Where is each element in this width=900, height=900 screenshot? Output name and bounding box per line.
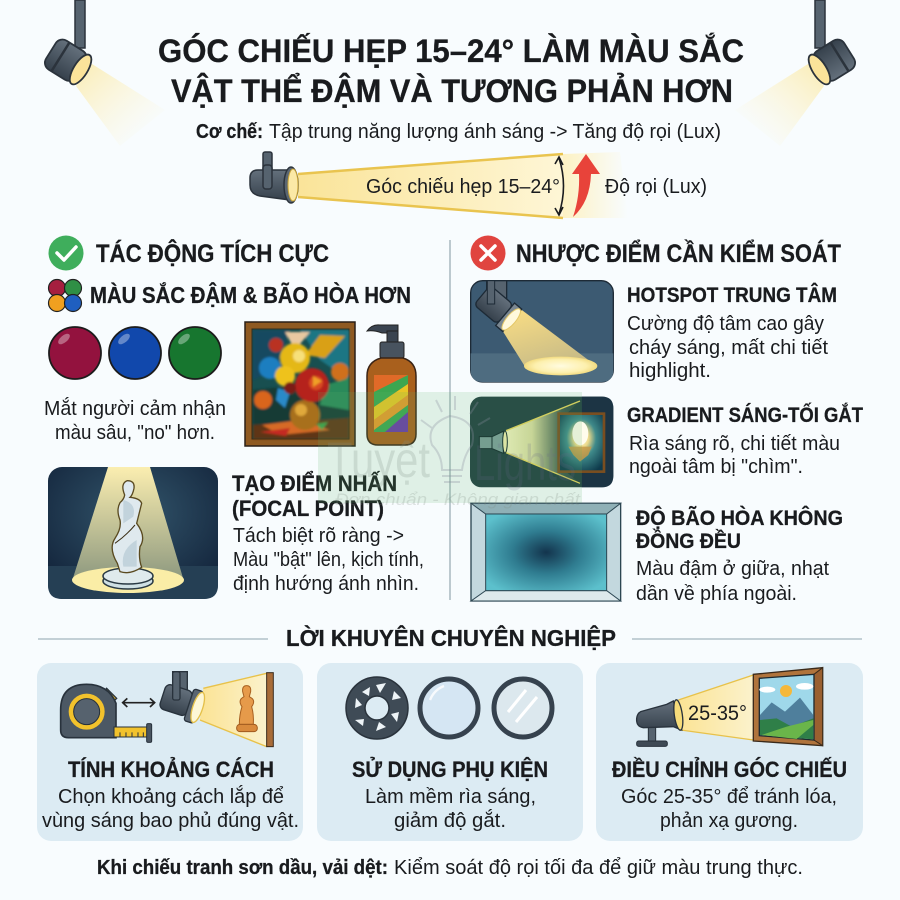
icon: honeycomb disc [346,677,408,739]
icon: filter [494,679,552,737]
panel: harsh gradient [470,397,863,487]
text: harsh gradient [627,403,863,478]
text: hotspot: HOTSPOT TRUNG TÂM [627,283,837,307]
text: hotspot [627,283,837,382]
angle value: 25-35° [688,702,747,725]
heading: positive effects: TÁC ĐỘNG TÍCH CỰC [96,238,329,268]
footer note [97,857,803,879]
text: perception: màu sâu, "no" hơn. [55,422,215,444]
text: angle: Góc 25-35° để tránh lóa, [621,786,837,808]
image: harsh gradient lamp [470,397,613,487]
watermark: Lights [474,435,576,491]
icon: angled lamp and picture [637,668,823,746]
text: focal point: TẠO ĐIỂM NHẤN [232,471,397,496]
text: focal point [232,471,424,595]
text: uneven saturation: ĐỒNG ĐỀU [636,529,741,553]
text: angle: ĐIỀU CHỈNH GÓC CHIẾU [612,757,847,782]
image: statue spotlight [48,467,218,599]
text: focal point: định hướng ánh nhìn. [233,573,419,595]
icon: tape measure and lamp [61,672,273,747]
text: focal point: (FOCAL POINT) [232,496,384,521]
text: uneven saturation: ĐỘ BÃO HÒA KHÔNG [636,506,843,530]
text: accessories: SỬ DỤNG PHỤ KIỆN [352,757,548,782]
text: uneven saturation: dần về phía ngoài. [636,583,797,605]
text: angle [612,757,847,832]
text: perception: Mắt người cảm nhận [44,397,226,420]
text: distance: vùng sáng bao phủ đúng vật. [42,810,299,832]
footer note: Khi chiếu tranh sơn dầu, vải dệt: [97,857,388,879]
heading: drawbacks [470,236,841,270]
text: distance: Chọn khoảng cách lắp để [58,785,284,808]
watermark: Tuyệt [327,432,430,488]
subtitle: mechanism: Cơ chế: [196,121,263,143]
title [158,33,744,109]
heading: professional tips: LỜI KHUYÊN CHUYÊN NGHIỆP [286,624,616,651]
lux label: Độ rọi (Lux) [605,176,707,198]
image: hotspot lamp [471,281,613,382]
text: hotspot: highlight. [629,360,711,382]
icon: diagram lamp [250,152,298,203]
angle label: Góc chiếu hẹp 15–24° [366,176,560,198]
text: harsh gradient: Rìa sáng rõ, chi tiết màu [629,433,840,455]
text: harsh gradient: ngoài tâm bị "chìm". [629,456,803,478]
icon: top-right spotlight [735,0,858,146]
title: GÓC CHIẾU HẸP 15–24° LÀM MÀU SẮC [158,33,744,69]
icon: lens [420,679,478,737]
text: uneven saturation [636,506,843,605]
text: accessories: giảm độ gắt. [394,809,506,832]
text: harsh gradient: GRADIENT SÁNG-TỐI GẮT [627,403,863,427]
panel: uneven saturation [471,503,843,605]
icon: oil painting [245,322,355,446]
angle arrow [555,157,564,215]
text: distance: TÍNH KHOẢNG CÁCH [68,757,274,782]
text: perception [44,397,226,444]
watermark [318,392,582,509]
heading: drawbacks: NHƯỢC ĐIỂM CẦN KIỂM SOÁT [516,239,841,268]
text: hotspot: cháy sáng, mất chi tiết [629,337,828,359]
text: hotspot: Cường độ tâm cao gây [627,313,824,335]
title: VẬT THỂ ĐẬM VÀ TƯƠNG PHẢN HƠN [171,73,733,109]
subtitle: mechanism: Tập trung năng lượng ánh sáng -> Tăng độ rọi (Lux) [269,121,721,143]
text: focal point: Màu "bật" lên, kịch tính, [233,549,424,571]
card: angle [596,663,863,841]
text: accessories [352,757,548,832]
image: uneven frame [471,503,621,601]
red lux arrow [572,154,600,217]
subheading: saturated colours: MÀU SẮC ĐẬM & BÃO HÒA HƠN [90,281,411,308]
divider: columns [449,240,451,600]
card: distance [37,663,303,841]
panel: saturated colours [44,280,416,446]
text: focal point: Tách biệt rõ ràng -> [233,525,404,547]
panel: hotspot [471,281,837,382]
footer note: Kiểm soát độ rọi tối đa để giữ màu trung thực. [394,857,803,879]
icon: colour dots [48,280,82,312]
icon: bottle [367,325,416,445]
diagram: narrow beam [250,152,707,218]
icon: top-left spotlight [42,0,165,146]
text: uneven saturation: Màu đậm ở giữa, nhạt [636,558,829,580]
text: distance [42,757,299,832]
watermark: Đơn chuẩn - Không gian chất [335,490,581,509]
card: accessories [317,663,583,841]
icon: colour spheres [49,327,221,379]
text: angle: phản xạ gương. [660,810,798,832]
panel: focal point [48,467,424,599]
heading: positive effects [48,236,329,270]
text: accessories: Làm mềm rìa sáng, [365,786,536,808]
